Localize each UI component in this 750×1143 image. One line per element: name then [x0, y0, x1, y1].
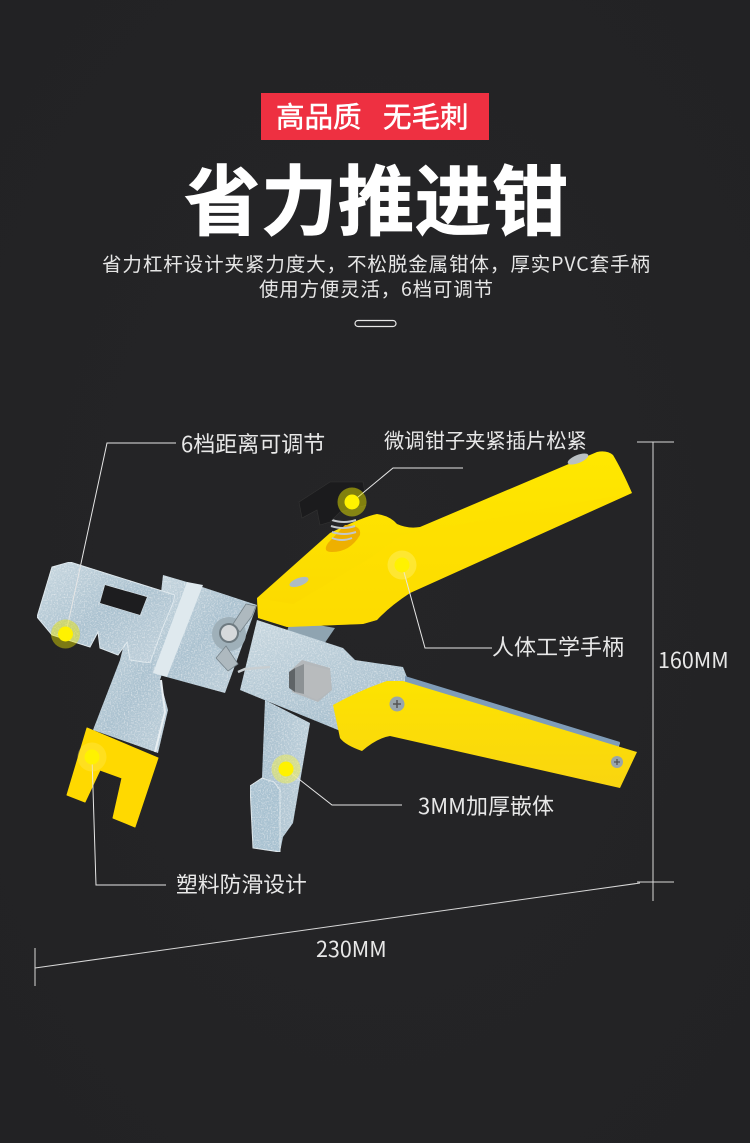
dimension: height [637, 442, 729, 901]
badge: quality [261, 93, 489, 140]
label: anti-slip: 塑料防滑设计 [176, 868, 307, 899]
marker: plastic tip [78, 742, 106, 772]
label: fine adjustment: 微调钳子夹紧插片松紧 [384, 424, 587, 454]
upper handle [257, 451, 632, 627]
marker: jaw [272, 754, 300, 784]
lower handle [333, 681, 637, 788]
badge: quality: 高品质 [276, 95, 362, 136]
plastic tip [67, 728, 158, 827]
subtitle text [102, 248, 650, 302]
subtitle text: 省力杠杆设计夹紧力度大，不松脱金属钳体，厚实PVC套手柄 [102, 248, 650, 277]
plate slot [100, 585, 147, 615]
knob and spring [299, 482, 367, 540]
product: leveling pliers [37, 451, 637, 852]
dimension: length [35, 883, 640, 986]
upper handle inner metal [285, 620, 335, 650]
adjustable toothed plate [37, 562, 175, 663]
cotter pin [238, 667, 270, 672]
label: six positions: 6档距离可调节 [181, 427, 325, 459]
clamp bright fold [153, 582, 203, 677]
divider pill [355, 320, 396, 326]
marker: handle [388, 550, 416, 580]
dimension: length: 230MM [316, 933, 387, 964]
bolt [289, 660, 332, 702]
dimension: height: 160MM [658, 644, 729, 675]
badge: quality: 无毛刺 [383, 95, 469, 136]
title: 省力推进钳 [184, 141, 568, 252]
pivot plate and lower metal arm [240, 620, 620, 749]
left arm [93, 620, 180, 753]
label: thick body: 3MM加厚嵌体 [418, 789, 554, 821]
lower arm edge [405, 676, 620, 748]
leader lines [66, 443, 492, 885]
label: ergonomic handle: 人体工学手柄 [492, 630, 624, 662]
subtitle text: 使用方便灵活，6档可调节 [259, 273, 493, 302]
clamp plate [152, 575, 257, 693]
wing nut [212, 604, 256, 671]
marker: adjustment plate [51, 620, 80, 648]
arm bent edge [155, 680, 165, 752]
lower jaw [250, 700, 310, 852]
marker: knob [338, 488, 366, 516]
